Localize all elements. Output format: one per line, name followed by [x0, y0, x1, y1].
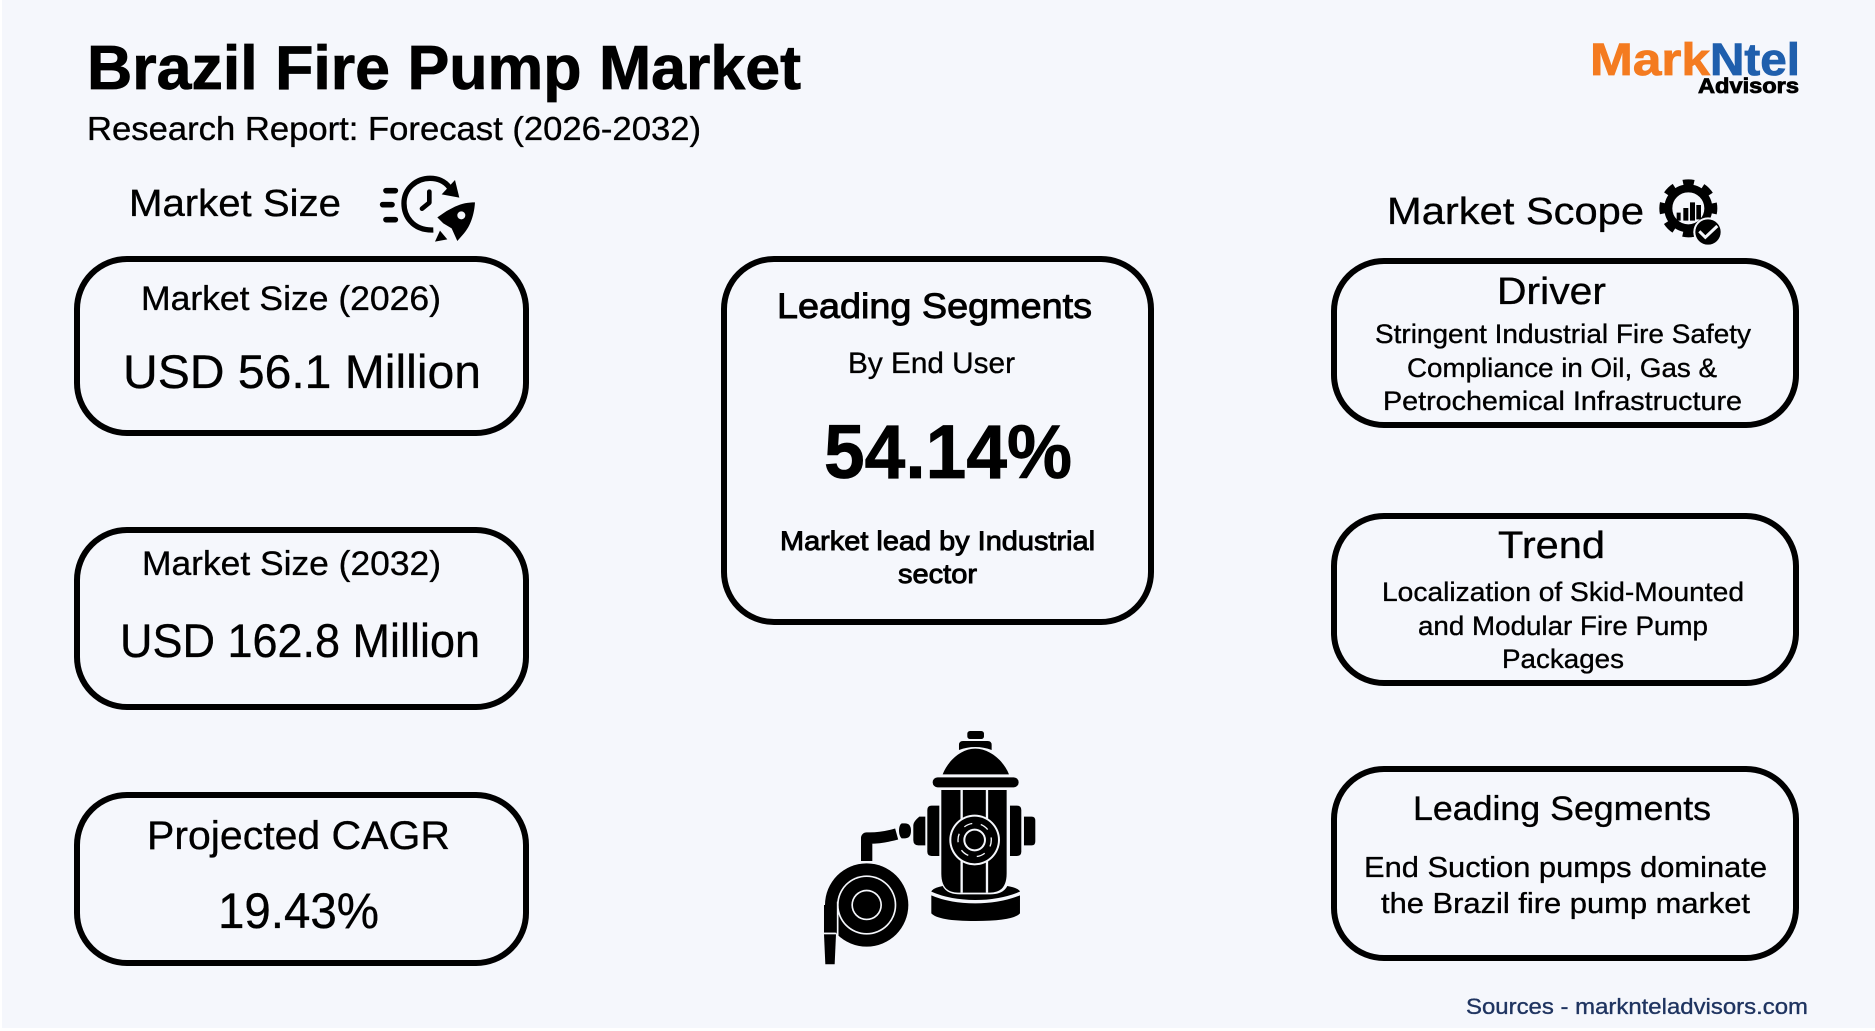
panel: driver: [1334, 261, 1796, 425]
logo: MarkNtel Advisors: Ntel: [1710, 34, 1800, 85]
logo: MarkNtel Advisors: [1590, 34, 1800, 98]
panel: market size 2032: USD 162.8 Million: [120, 614, 480, 667]
panel: trend: Trend: [1498, 525, 1605, 567]
panel: projected CAGR: [77, 795, 526, 963]
icon: clock and rocket: [383, 178, 475, 242]
panel: leading segments by end user: Market lead by Industrial: [780, 526, 1095, 556]
panel: driver: Stringent Industrial Fire Safety: [1375, 319, 1752, 349]
icon: gear with chart and check: [1663, 183, 1723, 247]
panel: trend: Localization of Skid-Mounted: [1382, 577, 1744, 607]
panel: leading segments by type: the Brazil fire pump market: [1381, 888, 1750, 920]
logo: MarkNtel Advisors: Advisors: [1698, 75, 1799, 98]
panel: leading segments by end user: By End User: [848, 347, 1015, 380]
panel: leading segments by type: End Suction pumps dominate: [1364, 852, 1767, 884]
panel: leading segments by end user: sector: [898, 559, 977, 589]
heading: market scope: Market Scope: [1387, 191, 1644, 233]
source note: Sources - marknteladvisors.com: [1466, 994, 1808, 1019]
title: Brazil Fire Pump Market: [87, 34, 801, 103]
panel: trend: and Modular Fire Pump: [1418, 611, 1708, 641]
panel: leading segments by type: [1334, 769, 1796, 958]
panel: market size 2026: Market Size (2026): [141, 280, 441, 318]
heading: market size: Market Size: [129, 183, 341, 225]
panel: driver: Petrochemical Infrastructure: [1383, 386, 1742, 416]
panel: leading segments by type: Leading Segments: [1413, 790, 1711, 828]
panel: driver: Compliance in Oil, Gas &: [1407, 353, 1717, 383]
panel: leading segments by end user: 54.14%: [824, 410, 1072, 495]
panel: market size 2026: [77, 259, 526, 433]
panel: trend: [1334, 516, 1796, 683]
panel: leading segments by end user: [724, 259, 1151, 622]
panel: market size 2032: Market Size (2032): [142, 545, 441, 583]
panel: driver: Driver: [1497, 271, 1606, 313]
panel: market size 2026: USD 56.1 Million: [123, 345, 481, 398]
icon: fire hydrant with hose: [824, 731, 1035, 964]
panel: projected CAGR: Projected CAGR: [147, 814, 450, 858]
panel: trend: Packages: [1502, 644, 1624, 674]
panel: projected CAGR: 19.43%: [218, 883, 379, 939]
subtitle: Research Report: Forecast (2026-2032): [87, 110, 701, 147]
panel: leading segments by end user: Leading Segments: [777, 287, 1092, 326]
panel: market size 2032: [77, 530, 526, 707]
logo: MarkNtel Advisors: Mark: [1590, 34, 1711, 85]
